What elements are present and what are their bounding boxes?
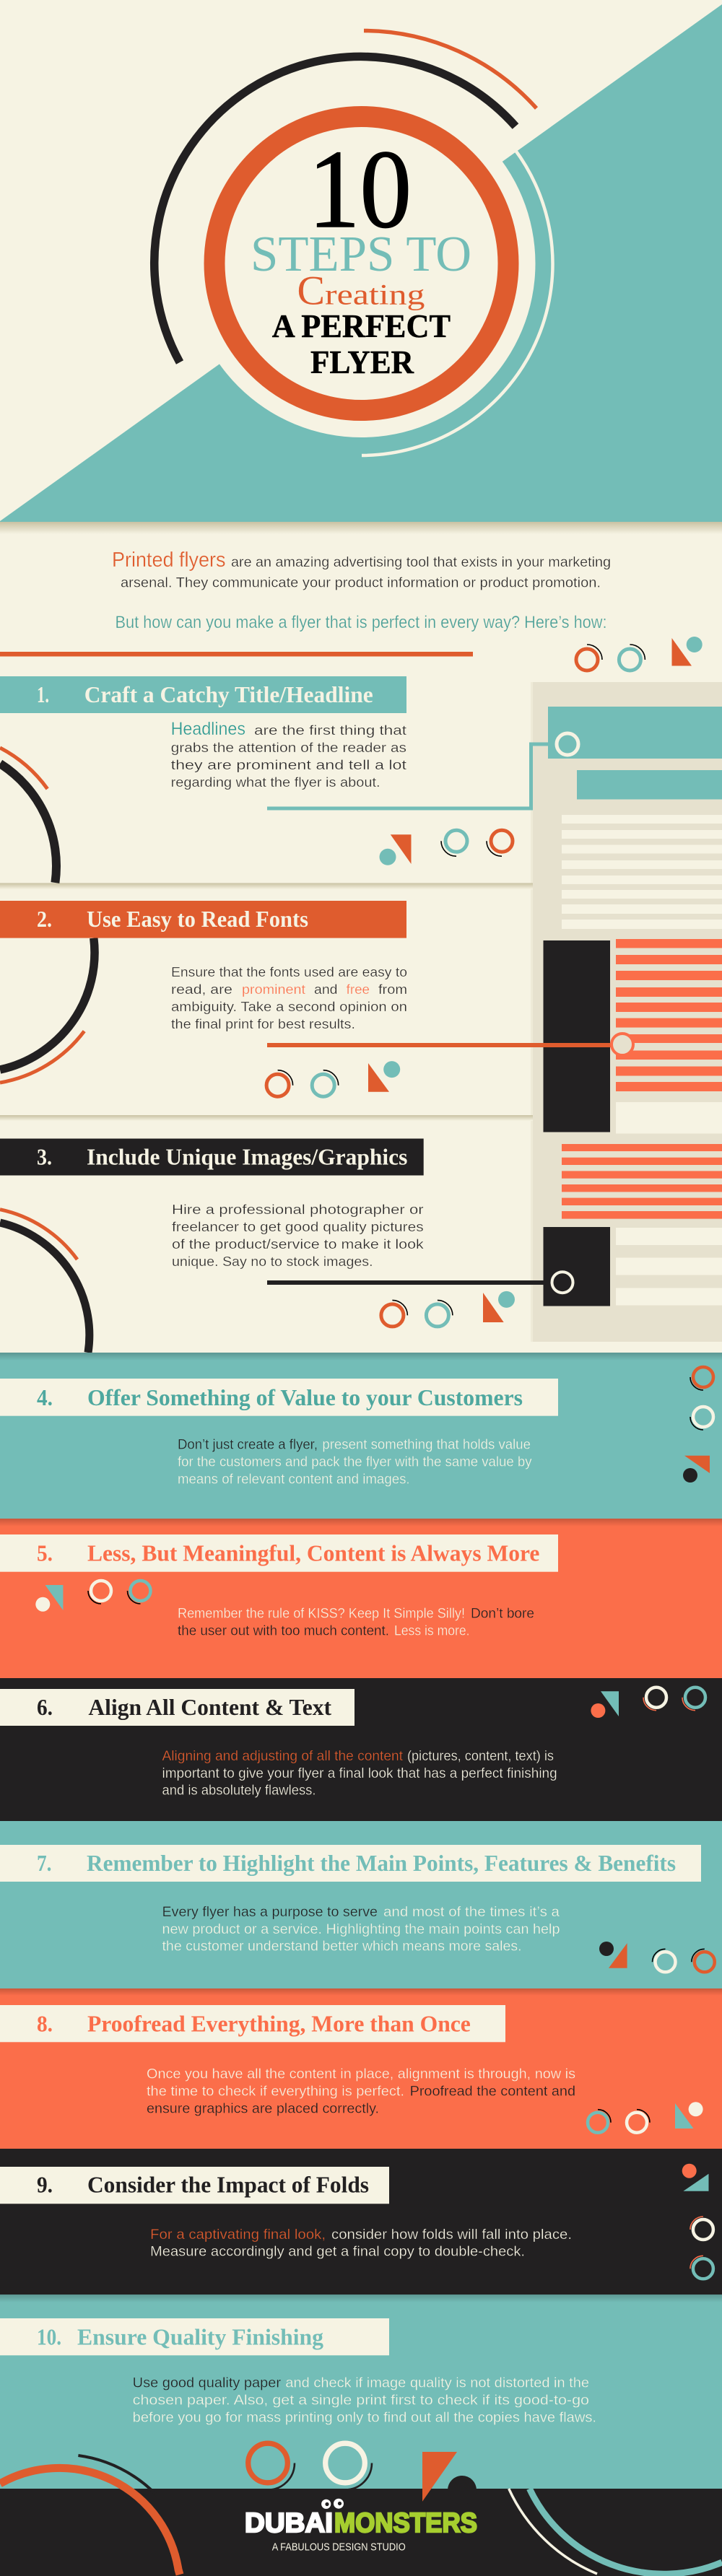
step 9 heading <box>0 2167 389 2204</box>
intro text: Printed flyers <box>112 549 225 572</box>
panel: step 7 <box>0 1821 722 1988</box>
step 4 body: for the customers and pack the flyer with the same value by <box>178 1454 532 1470</box>
footer arcs <box>0 2455 722 2575</box>
step 9 body: Measure accordingly and get a final copy to double-check. <box>150 2244 525 2260</box>
step 6 body <box>162 1748 557 1799</box>
step 10 heading <box>0 2318 389 2355</box>
title <box>251 127 471 380</box>
step 6 heading <box>0 1689 355 1726</box>
step 10 heading: Ensure Quality Finishing <box>77 2323 323 2349</box>
teal diagonal background <box>0 4 722 522</box>
title: FLYER <box>310 344 414 380</box>
step 2 body: and <box>314 982 338 997</box>
step 5 body: Less is more. <box>394 1623 469 1639</box>
step 7 body: the customer understand better which means more sales. <box>162 1939 522 1955</box>
hero shadow <box>0 522 722 534</box>
title: C <box>297 268 325 313</box>
footer shapes <box>248 2443 477 2505</box>
step 2 heading: 2. <box>37 906 52 932</box>
step 1 body <box>171 719 406 790</box>
step 8 body: ensure graphics are placed correctly. <box>147 2100 379 2116</box>
step 6 body: Aligning and adjusting of all the content <box>162 1748 404 1764</box>
logo: MONSTERS <box>334 2508 477 2538</box>
step 3 body: unique. Say no to stock images. <box>172 1254 373 1269</box>
step 4 body: present something that holds value <box>322 1437 531 1453</box>
step 9 heading: 9. <box>37 2172 53 2198</box>
icons: step 3 shapes <box>381 1291 515 1327</box>
panel: step 6 <box>0 1678 722 1821</box>
title: A PERFECT <box>272 307 451 344</box>
icons: step 7 shapes <box>599 1942 715 1972</box>
step 1 connector <box>267 733 578 808</box>
intro text <box>112 549 611 632</box>
orange ring <box>214 117 508 410</box>
step 8 body: Proofread the content and <box>410 2083 575 2099</box>
step 9 body: For a captivating final look, <box>150 2227 326 2243</box>
flyer illustration panel <box>531 682 722 1342</box>
step 7 body: new product or a service. Highlighting the main points can help <box>162 1921 560 1937</box>
cream thin arc <box>362 149 553 455</box>
step 10 body: Use good quality paper <box>133 2375 282 2391</box>
step 5 heading <box>0 1534 558 1572</box>
icons: step 9 shapes <box>682 2164 713 2279</box>
step 2 body: free <box>347 982 370 997</box>
step 1 body: they are prominent and tell a lot <box>171 757 406 772</box>
step 2 body: prominent <box>242 982 305 997</box>
icons: step 8 shapes <box>588 2102 703 2133</box>
icons: step 5 shapes <box>35 1581 150 1612</box>
panel: step 5 <box>0 1519 722 1678</box>
intro text: arsenal. They communicate your product information or product promotion. <box>121 575 601 591</box>
panel: step 8 <box>0 1988 722 2149</box>
step 2 heading <box>0 901 406 938</box>
step 9 body: consider how folds will fall into place. <box>331 2227 572 2243</box>
step 8 body <box>147 2066 575 2116</box>
step 8 body: Once you have all the content in place, alignment is through, now is <box>147 2066 575 2082</box>
step 3 body: freelancer to get good quality pictures <box>172 1219 424 1234</box>
title: 10 <box>308 127 412 251</box>
step 7 body: Every flyer has a purpose to serve <box>162 1904 378 1920</box>
step 5 body: Remember the rule of KISS? Keep It Simple Silly! <box>178 1606 465 1622</box>
step 2 body: read, are <box>171 982 232 997</box>
step 3 body <box>172 1202 425 1269</box>
step 1 body: Headlines <box>171 719 245 739</box>
step 10 body <box>133 2375 596 2425</box>
panel: step 10 <box>0 2295 722 2489</box>
step 10 heading: 10. <box>37 2323 61 2349</box>
step 3 connector <box>267 1272 573 1293</box>
step 4 heading <box>0 1379 558 1416</box>
step 4 body: means of relevant content and images. <box>178 1472 410 1488</box>
title: STEPS TO <box>251 227 471 282</box>
icons: step 6 shapes <box>591 1688 705 1718</box>
logo: DUBAI <box>245 2508 333 2538</box>
orange thin arc <box>364 30 536 108</box>
step 3 heading <box>0 1139 424 1175</box>
step 9 heading: Consider the Impact of Folds <box>87 2172 369 2198</box>
intro text: are an amazing advertising tool that exists in your marketing <box>231 554 611 570</box>
step 7 heading: 7. <box>37 1850 52 1876</box>
step 7 body <box>162 1904 560 1955</box>
step 3 body: Hire a professional photographer or <box>172 1202 424 1217</box>
step 10 body: chosen paper. Also, get a single print first to check if its good-to-go <box>133 2392 589 2408</box>
step 8 heading <box>0 2005 505 2042</box>
title: reating <box>325 279 425 310</box>
step 2 connector <box>267 1034 633 1055</box>
step 4 body <box>178 1437 532 1488</box>
step 5 body: the user out with too much content. <box>178 1623 389 1639</box>
separator shadows <box>0 883 533 1121</box>
step 4 heading: Offer Something of Value to your Customers <box>87 1384 523 1410</box>
step 6 body: (pictures, content, text) is <box>407 1748 554 1764</box>
logo <box>245 2499 477 2553</box>
step 4 heading: 4. <box>37 1384 53 1410</box>
panel: step 9 <box>0 2149 722 2295</box>
step 8 heading: 8. <box>37 2010 53 2036</box>
step 3 heading: Include Unique Images/Graphics <box>87 1143 407 1169</box>
step 2 body: ambiguity. Take a second opinion on <box>171 999 407 1014</box>
step 4 body: Don’t just create a flyer, <box>178 1437 318 1453</box>
left arcs <box>0 748 95 1353</box>
step 5 heading: 5. <box>37 1540 53 1566</box>
step 7 heading: Remember to Highlight the Main Points, Features & Benefits <box>87 1850 676 1876</box>
icons: step 1 shapes <box>380 830 513 865</box>
step 2 body <box>171 964 407 1031</box>
step 8 heading: Proofread Everything, More than Once <box>87 2010 471 2036</box>
step 7 body: and most of the times it’s a <box>383 1904 560 1920</box>
step 9 body <box>150 2227 572 2260</box>
panel: footer <box>0 2443 722 2576</box>
step 6 body: important to give your flyer a final look that has a perfect finishing <box>162 1765 557 1781</box>
step 5 body <box>178 1606 534 1639</box>
step 10 body: and check if image quality is not distorted in the <box>285 2375 589 2391</box>
step 2 body: the final print for best results. <box>171 1016 355 1031</box>
icons: step 4 shapes <box>683 1367 713 1483</box>
panel: step 4 <box>0 1353 722 1519</box>
step 7 heading <box>0 1845 701 1882</box>
step 8 body: the time to check if everything is perfect. <box>147 2083 404 2099</box>
logo: A FABULOUS DESIGN STUDIO <box>272 2541 406 2553</box>
orange divider line <box>0 652 473 657</box>
step 2 body: from <box>378 982 407 997</box>
step 2 body: Ensure that the fonts used are easy to <box>171 964 407 979</box>
step 6 heading: 6. <box>37 1694 53 1720</box>
step 5 heading: Less, But Meaningful, Content is Always More <box>87 1540 539 1566</box>
dark arc <box>155 56 516 362</box>
cream circle <box>188 89 536 437</box>
step 3 body: of the product/service to make it look <box>172 1236 425 1252</box>
icons: step 2 shapes <box>266 1061 400 1096</box>
panel: hero header <box>0 4 722 534</box>
step 3 heading: 3. <box>37 1143 52 1169</box>
step 1 heading <box>0 676 406 713</box>
step 10 body: before you go for mass printing only to find out all the copies have flaws. <box>133 2409 596 2425</box>
step 1 heading: Craft a Catchy Title/Headline <box>84 681 373 707</box>
step 2 heading: Use Easy to Read Fonts <box>87 906 308 932</box>
intro text: But how can you make a flyer that is perfect in every way? Here’s how: <box>116 613 606 632</box>
step 1 heading: 1. <box>37 681 49 707</box>
step 1 body: are the first thing that <box>254 722 406 738</box>
step 6 body: and is absolutely flawless. <box>162 1783 316 1799</box>
icons: intro shapes <box>576 637 703 671</box>
step 6 heading: Align All Content & Text <box>88 1694 331 1720</box>
step 1 body: regarding what the flyer is about. <box>171 774 380 790</box>
step 1 body: grabs the attention of the reader as <box>171 740 406 755</box>
step 5 body: Don’t bore <box>471 1606 534 1622</box>
